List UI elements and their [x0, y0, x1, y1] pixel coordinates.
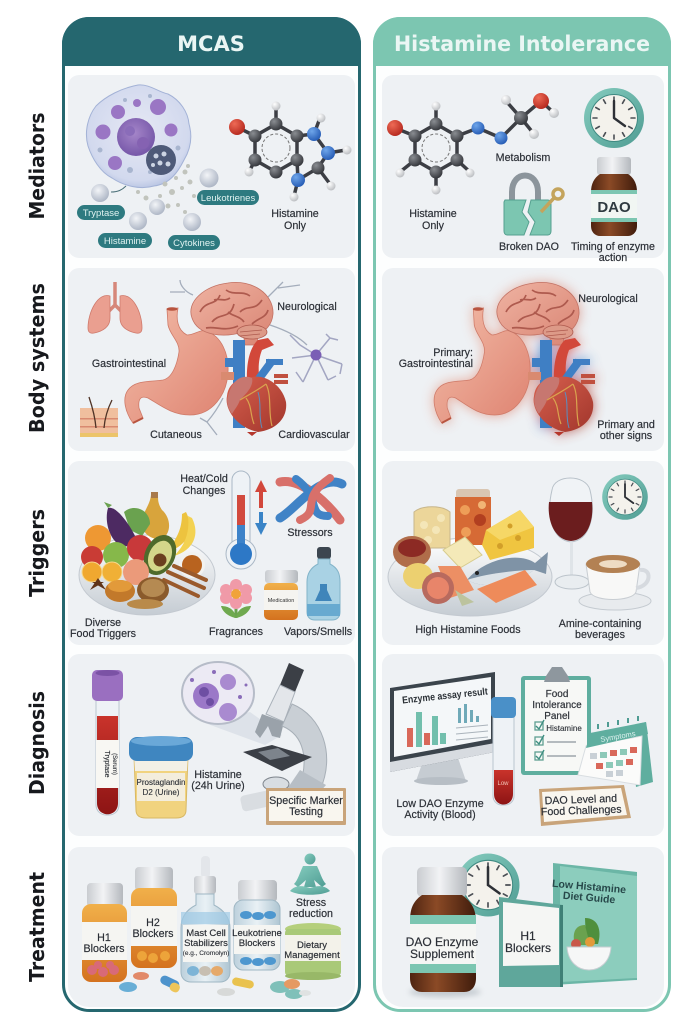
label pill: Cytokines [168, 235, 220, 250]
icon: DAO bottle [591, 157, 637, 236]
icon: wine glass [549, 478, 592, 589]
card: HI treatment [382, 847, 664, 1007]
icon: leukotriene blockers bottle: Blockers [239, 938, 275, 949]
icon: mast cell stabilizers dropper: Stabilizers [184, 938, 228, 949]
card: MCAS body systems [68, 268, 355, 451]
label pill: Leukotrienes [197, 190, 259, 205]
icon: mast cell [86, 85, 191, 188]
icon: H1 blockers bottle: Blockers [84, 943, 124, 955]
label: Heat/Cold Changes: Heat/Cold [180, 473, 228, 485]
icon: food intolerance clipboard [521, 667, 591, 775]
label: Primary Gastrointestinal: Gastrointestinal [399, 358, 473, 370]
icon: urine cup: D2 (Urine) [143, 788, 180, 797]
sign: Specific Marker Testing: Specific Marker [269, 795, 343, 807]
label: Broken DAO: Broken DAO [499, 241, 559, 253]
icon: mast cell stabilizers dropper: Mast Cell [186, 928, 226, 939]
caption: Histamine Only: Histamine [271, 208, 319, 220]
card: HI mediators [382, 75, 664, 264]
icon: meditating figure [290, 854, 330, 895]
icon: medicine bottle: Medication [268, 598, 294, 604]
label: Timing of enzyme action: Timing of enzyme [571, 241, 655, 253]
icon: mast cell stabilizers dropper [181, 856, 230, 982]
icon: dietary management jar: Dietary [297, 940, 327, 951]
label: Primary and other signs: other signs [600, 430, 652, 442]
icon: symptoms calendar: Symptoms [600, 729, 636, 744]
icon: brain [497, 282, 579, 345]
card: HI diagnosis [382, 654, 664, 836]
icon: microscope [240, 663, 327, 812]
icon: tryptase blood tube: Tryptase [103, 751, 110, 778]
icon: scattered pills [119, 972, 311, 999]
icon: blood tube [491, 697, 516, 805]
label: Primary Gastrointestinal: Primary: [433, 347, 473, 359]
sign: DAO Level and Food Challenges: Food Challenges [541, 804, 622, 818]
icon: H1 blockers bottle [82, 883, 127, 982]
label: Stressors: Stressors [287, 527, 333, 539]
icon: monitor with assay result: Enzyme assay result [402, 686, 489, 706]
label: Stress reduction: Stress [296, 897, 326, 909]
card: MCAS diagnosis [68, 654, 355, 836]
label: Cardiovascular: Cardiovascular [278, 429, 350, 441]
icon: leukotriene blockers bottle: Leukotriene [232, 928, 282, 939]
panel: MCAS column [62, 17, 361, 1010]
icon: clock [602, 474, 648, 520]
icon: skin [80, 397, 118, 437]
icon: dietary management jar [284, 923, 341, 980]
row label: Mediators: Mediators [25, 112, 49, 220]
icon: diet guide book [552, 863, 637, 985]
icon: tryptase blood tube: (Serum) [111, 753, 117, 775]
icon: high histamine food plate [388, 489, 552, 616]
icon: clock [584, 88, 644, 148]
icon: urine cup [129, 736, 193, 818]
label: Diverse Food Triggers: Diverse [85, 617, 121, 629]
label pill: Leukotrienes: Leukotrienes [201, 193, 255, 204]
label pill: Cytokines: Cytokines [173, 238, 215, 249]
icon: flower [220, 579, 252, 618]
panel: Histamine Intolerance column [373, 17, 671, 1010]
icon: H2 blockers bottle: H2 [146, 917, 160, 929]
arrows: temperature change [255, 480, 267, 535]
row label: Triggers: Triggers [25, 509, 49, 597]
icon: DAO bottle: DAO [597, 199, 631, 216]
label: Neurological: Neurological [578, 293, 638, 305]
card: HI triggers [382, 461, 664, 645]
icon: neuron [290, 334, 342, 382]
sign: DAO Level and Food Challenges: DAO Level and [544, 793, 617, 807]
card: HI body systems [382, 268, 664, 451]
label: Histamine (24h Urine): (24h Urine) [191, 780, 245, 792]
icon: lungs [88, 282, 142, 333]
heading: Histamine Intolerance: Histamine Intolerance [394, 32, 650, 56]
sign: DAO Level and Food Challenges [539, 785, 631, 826]
label: Heat/Cold Changes: Changes [183, 485, 225, 497]
icon: stomach [125, 307, 228, 423]
icon: urine cup: Prostaglandin [137, 778, 185, 787]
caption: Histamine Only: Only [422, 220, 445, 232]
card: MCAS treatment [68, 847, 355, 1007]
icon: blood tube: Low [497, 781, 509, 787]
label: High Histamine Foods: High Histamine Foods [415, 624, 521, 636]
icon: H1 blockers book: H1 [520, 929, 536, 943]
label pill: Histamine [98, 233, 152, 248]
label: Neurological: Neurological [277, 301, 337, 313]
icon: food intolerance clipboard: Panel [544, 711, 570, 722]
icon: H1 blockers book: Blockers [505, 941, 551, 955]
icon: food intolerance clipboard: Food [546, 689, 568, 700]
label: Gastrointestinal: Gastrointestinal [92, 358, 166, 370]
label pill: Histamine: Histamine [104, 236, 146, 247]
icon: medicine bottle [264, 570, 298, 620]
icon: heart [221, 338, 288, 436]
sign: Specific Marker Testing [266, 788, 346, 825]
icon: mast cell stabilizers dropper: (e.g., Cromolyn) [183, 950, 229, 957]
label: Histamine (24h Urine): Histamine [194, 769, 242, 781]
sign: Specific Marker Testing: Testing [289, 806, 323, 818]
icon: vapor bottle [307, 547, 340, 620]
label: Amine-containing beverages: Amine-containing [559, 618, 641, 630]
label pill: Tryptase [77, 205, 125, 220]
icon: DAO supplement bottle: Supplement [410, 947, 475, 961]
icon: histamine molecule [229, 102, 352, 202]
row label: Treatment: Treatment [25, 872, 49, 982]
icon: thermometer [226, 471, 256, 569]
label pill: Tryptase: Tryptase [83, 208, 119, 219]
icon: tryptase blood tube [92, 670, 123, 815]
icon: clock [456, 854, 520, 916]
row label: Body systems: Body systems [25, 283, 49, 433]
label: Fragrances: Fragrances [209, 626, 263, 638]
icon: dietary management jar: Management [284, 950, 340, 961]
icon: DAO supplement bottle: DAO Enzyme [406, 935, 478, 949]
icon: food intolerance clipboard: Intolerance [532, 700, 582, 711]
icon: DAO supplement bottle [406, 867, 481, 997]
label: Low DAO Enzyme Activity (Blood): Activity (Blood) [404, 809, 476, 821]
icon: leukotriene blockers bottle [232, 880, 282, 970]
label: Vapors/Smells: Vapors/Smells [284, 626, 352, 638]
icon: H1 blockers book [499, 897, 563, 987]
icon: brain [191, 282, 273, 345]
nerve lines [170, 280, 307, 435]
label: Primary and other signs: Primary and [597, 419, 655, 431]
label: Cutaneous: Cutaneous [150, 429, 202, 441]
label: Stress reduction: reduction [289, 908, 333, 920]
label: Timing of enzyme action: action [599, 252, 627, 264]
icon: food plate [79, 492, 215, 615]
card: MCAS mediators [68, 75, 355, 258]
icon: magnified cells [182, 662, 282, 745]
icon: diet guide book: Diet Guide [562, 890, 616, 906]
icon: broken lock and key [504, 176, 563, 235]
icon: food intolerance clipboard: Histamine [546, 724, 582, 733]
icon: symptoms calendar [578, 716, 653, 787]
icon: coffee cup [579, 555, 651, 610]
icon: histamine metabolism molecule [387, 93, 559, 194]
peach inflammation glow [434, 282, 595, 436]
icon: stress knot [280, 478, 342, 520]
icon: H2 blockers bottle [131, 867, 177, 968]
icon: stomach [434, 307, 530, 423]
icon: released granules [91, 164, 218, 231]
icon: H2 blockers bottle: Blockers [133, 928, 173, 940]
label: Low DAO Enzyme Activity (Blood): Low DAO Enzyme [396, 798, 484, 810]
caption: Histamine Only: Histamine [409, 208, 457, 220]
heading: MCAS: MCAS [177, 32, 245, 56]
label: Diverse Food Triggers: Food Triggers [70, 628, 136, 640]
row label: Diagnosis: Diagnosis [25, 691, 49, 795]
card: MCAS triggers [68, 461, 355, 645]
icon: H1 blockers bottle: H1 [97, 932, 111, 944]
icon: monitor with assay result [390, 672, 495, 785]
icon: heart [528, 338, 595, 436]
label: Amine-containing beverages: beverages [575, 629, 625, 641]
label: Metabolism: Metabolism [496, 152, 550, 164]
caption: Histamine Only: Only [284, 220, 307, 232]
icon: diet guide book: Low Histamine [552, 878, 627, 896]
